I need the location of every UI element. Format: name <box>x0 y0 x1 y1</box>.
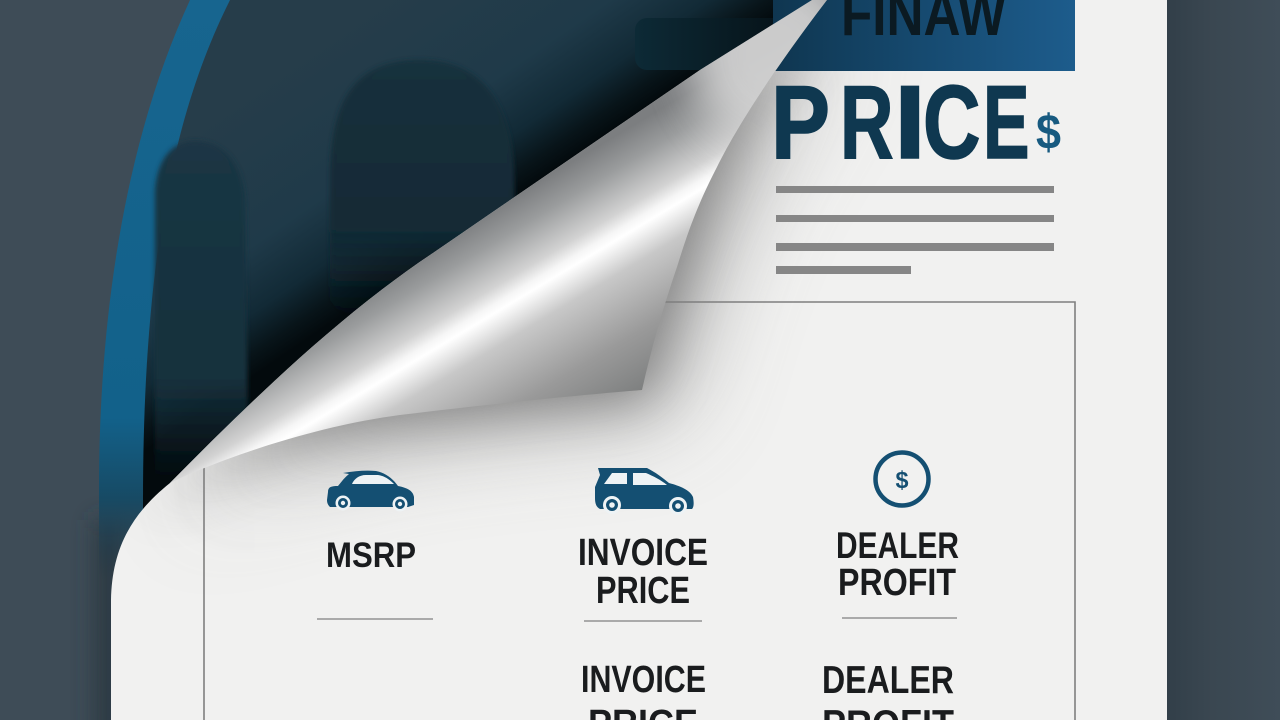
icon: large car <box>595 468 694 515</box>
lower row: dealer profit: DEALER <box>822 659 954 702</box>
placeholder text lines <box>776 186 1054 274</box>
table frame <box>204 302 1075 720</box>
dark interior revealed by the peel <box>143 0 830 560</box>
shadow cast by the fold on the paper <box>158 71 853 528</box>
heading: PRICE: R <box>840 65 894 181</box>
heading: PRICE: E <box>983 65 1030 181</box>
column: invoice price <box>578 468 708 622</box>
heading: PRICE: I <box>894 65 926 181</box>
icon: dollar coin: $ <box>896 467 909 494</box>
heading: PRICE <box>771 65 1030 181</box>
label: MSRP: MSRP <box>326 536 416 575</box>
blue arc band behind the page <box>99 0 240 580</box>
icon: small car <box>327 471 414 512</box>
column: dealer profit: PROFIT <box>838 562 956 604</box>
dark seat silhouette left <box>155 141 248 480</box>
lower row: dealer profit <box>822 659 954 720</box>
column: MSRP <box>317 471 433 620</box>
lower row: invoice price: INVOICE <box>581 659 706 701</box>
peeled page corner <box>170 0 860 483</box>
shadow left of the page <box>96 520 122 720</box>
column: dealer profit <box>836 452 959 619</box>
icon: small dollar sign: $ <box>1036 106 1061 160</box>
blue banner <box>773 0 1075 71</box>
lower row: invoice price <box>581 659 706 720</box>
heading: PRICE: P <box>771 65 830 181</box>
label: dealer profit: DEALER <box>836 525 959 566</box>
column: invoice price: PRICE <box>596 570 690 612</box>
heading: PRICE: C <box>923 65 980 181</box>
label: invoice price: INVOICE <box>578 532 708 574</box>
dark rounded bar behind banner <box>635 18 805 70</box>
dark seat silhouette centre <box>330 60 516 320</box>
icon: dollar coin <box>876 452 928 506</box>
